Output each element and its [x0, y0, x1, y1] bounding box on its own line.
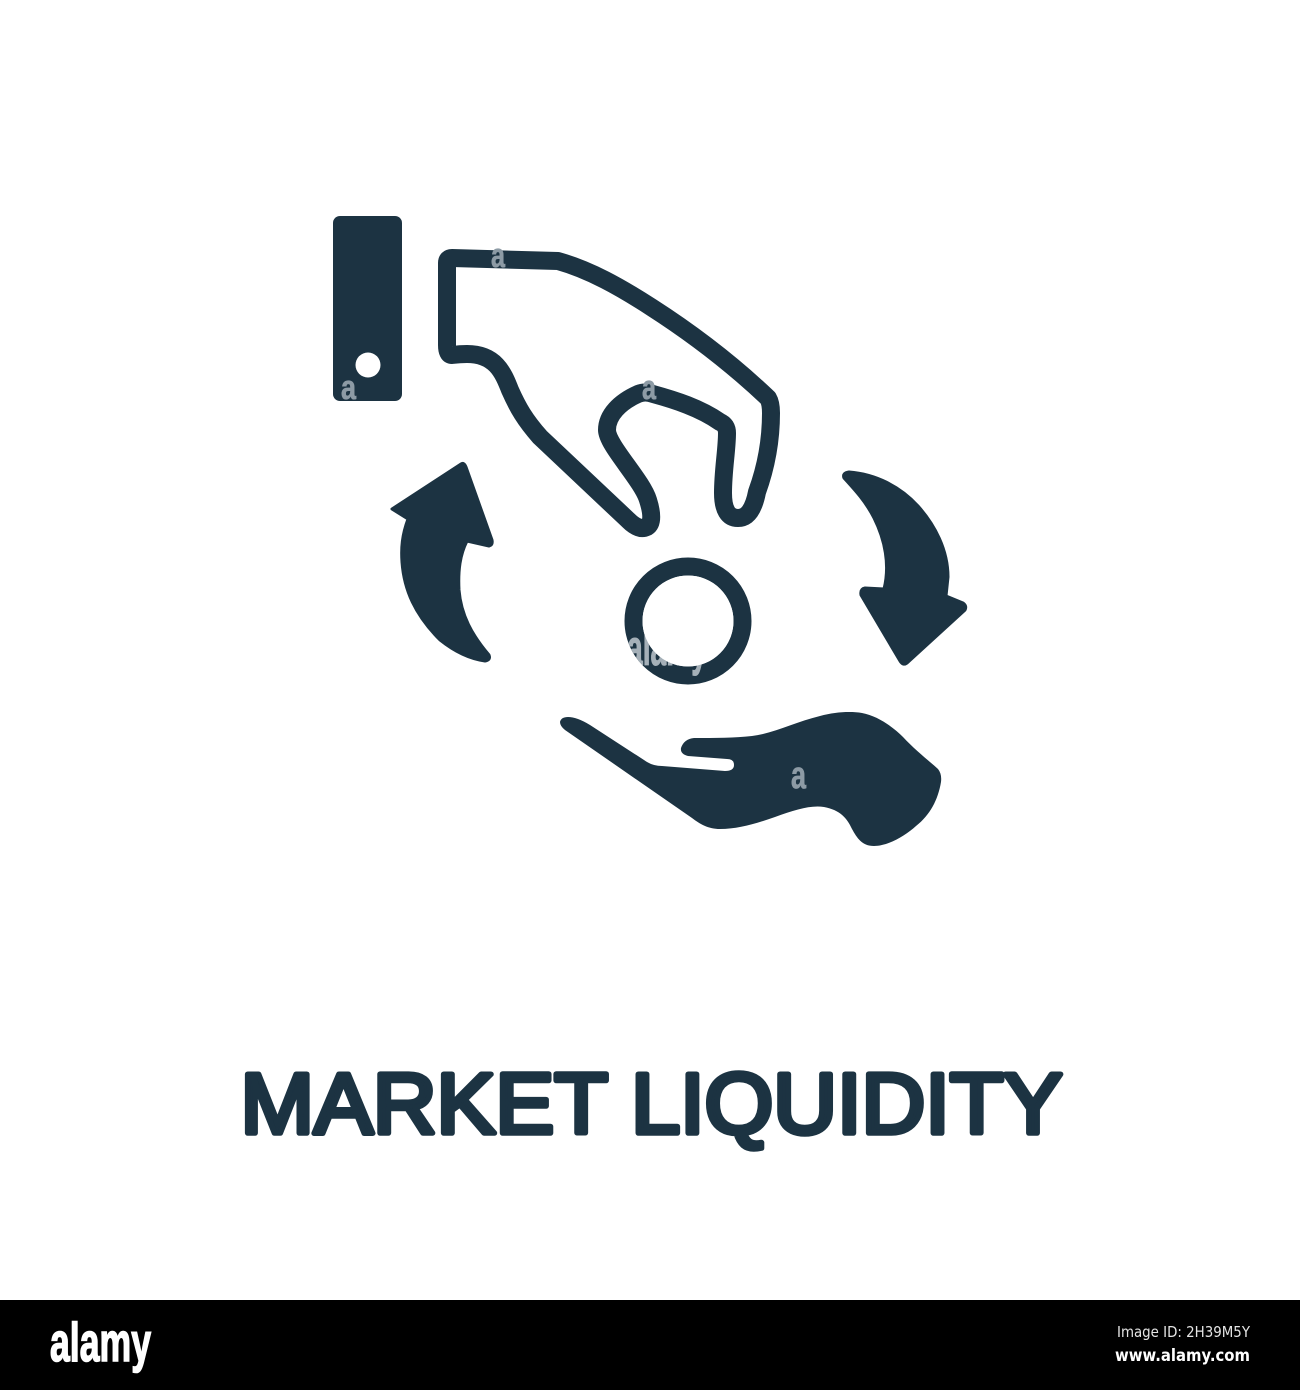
- icon: shirt cuff with button: [333, 216, 402, 401]
- footer logo: alamy: alamy: [50, 1311, 151, 1373]
- footer text: image id: Image ID: 2H39M5Y: [1117, 1323, 1251, 1341]
- watermark: small letter a on wrist: a: [491, 237, 506, 275]
- footer text: website: www.alamy.com: [1115, 1346, 1250, 1365]
- title: MARKET LIQUIDITY: [240, 1057, 1062, 1152]
- arrow: right curved arrow pointing down: [844, 472, 966, 664]
- watermark: small letter a on finger: a: [642, 369, 657, 407]
- watermark: alamy over coin ring: [627, 576, 734, 676]
- watermark: small letter a on lower hand: a: [791, 755, 807, 797]
- watermark: small letter a on cuff: a: [341, 369, 357, 407]
- footer bar: [0, 1300, 1300, 1390]
- watermark: alamy over coin ring: alamy: [627, 620, 707, 676]
- arrow: left curved arrow pointing up: [392, 463, 492, 661]
- icon: market liquidity: [333, 216, 966, 846]
- icon: lower open hand: [560, 712, 941, 846]
- icon: upper hand outline: [447, 258, 771, 528]
- icon: coin ring: [634, 566, 742, 676]
